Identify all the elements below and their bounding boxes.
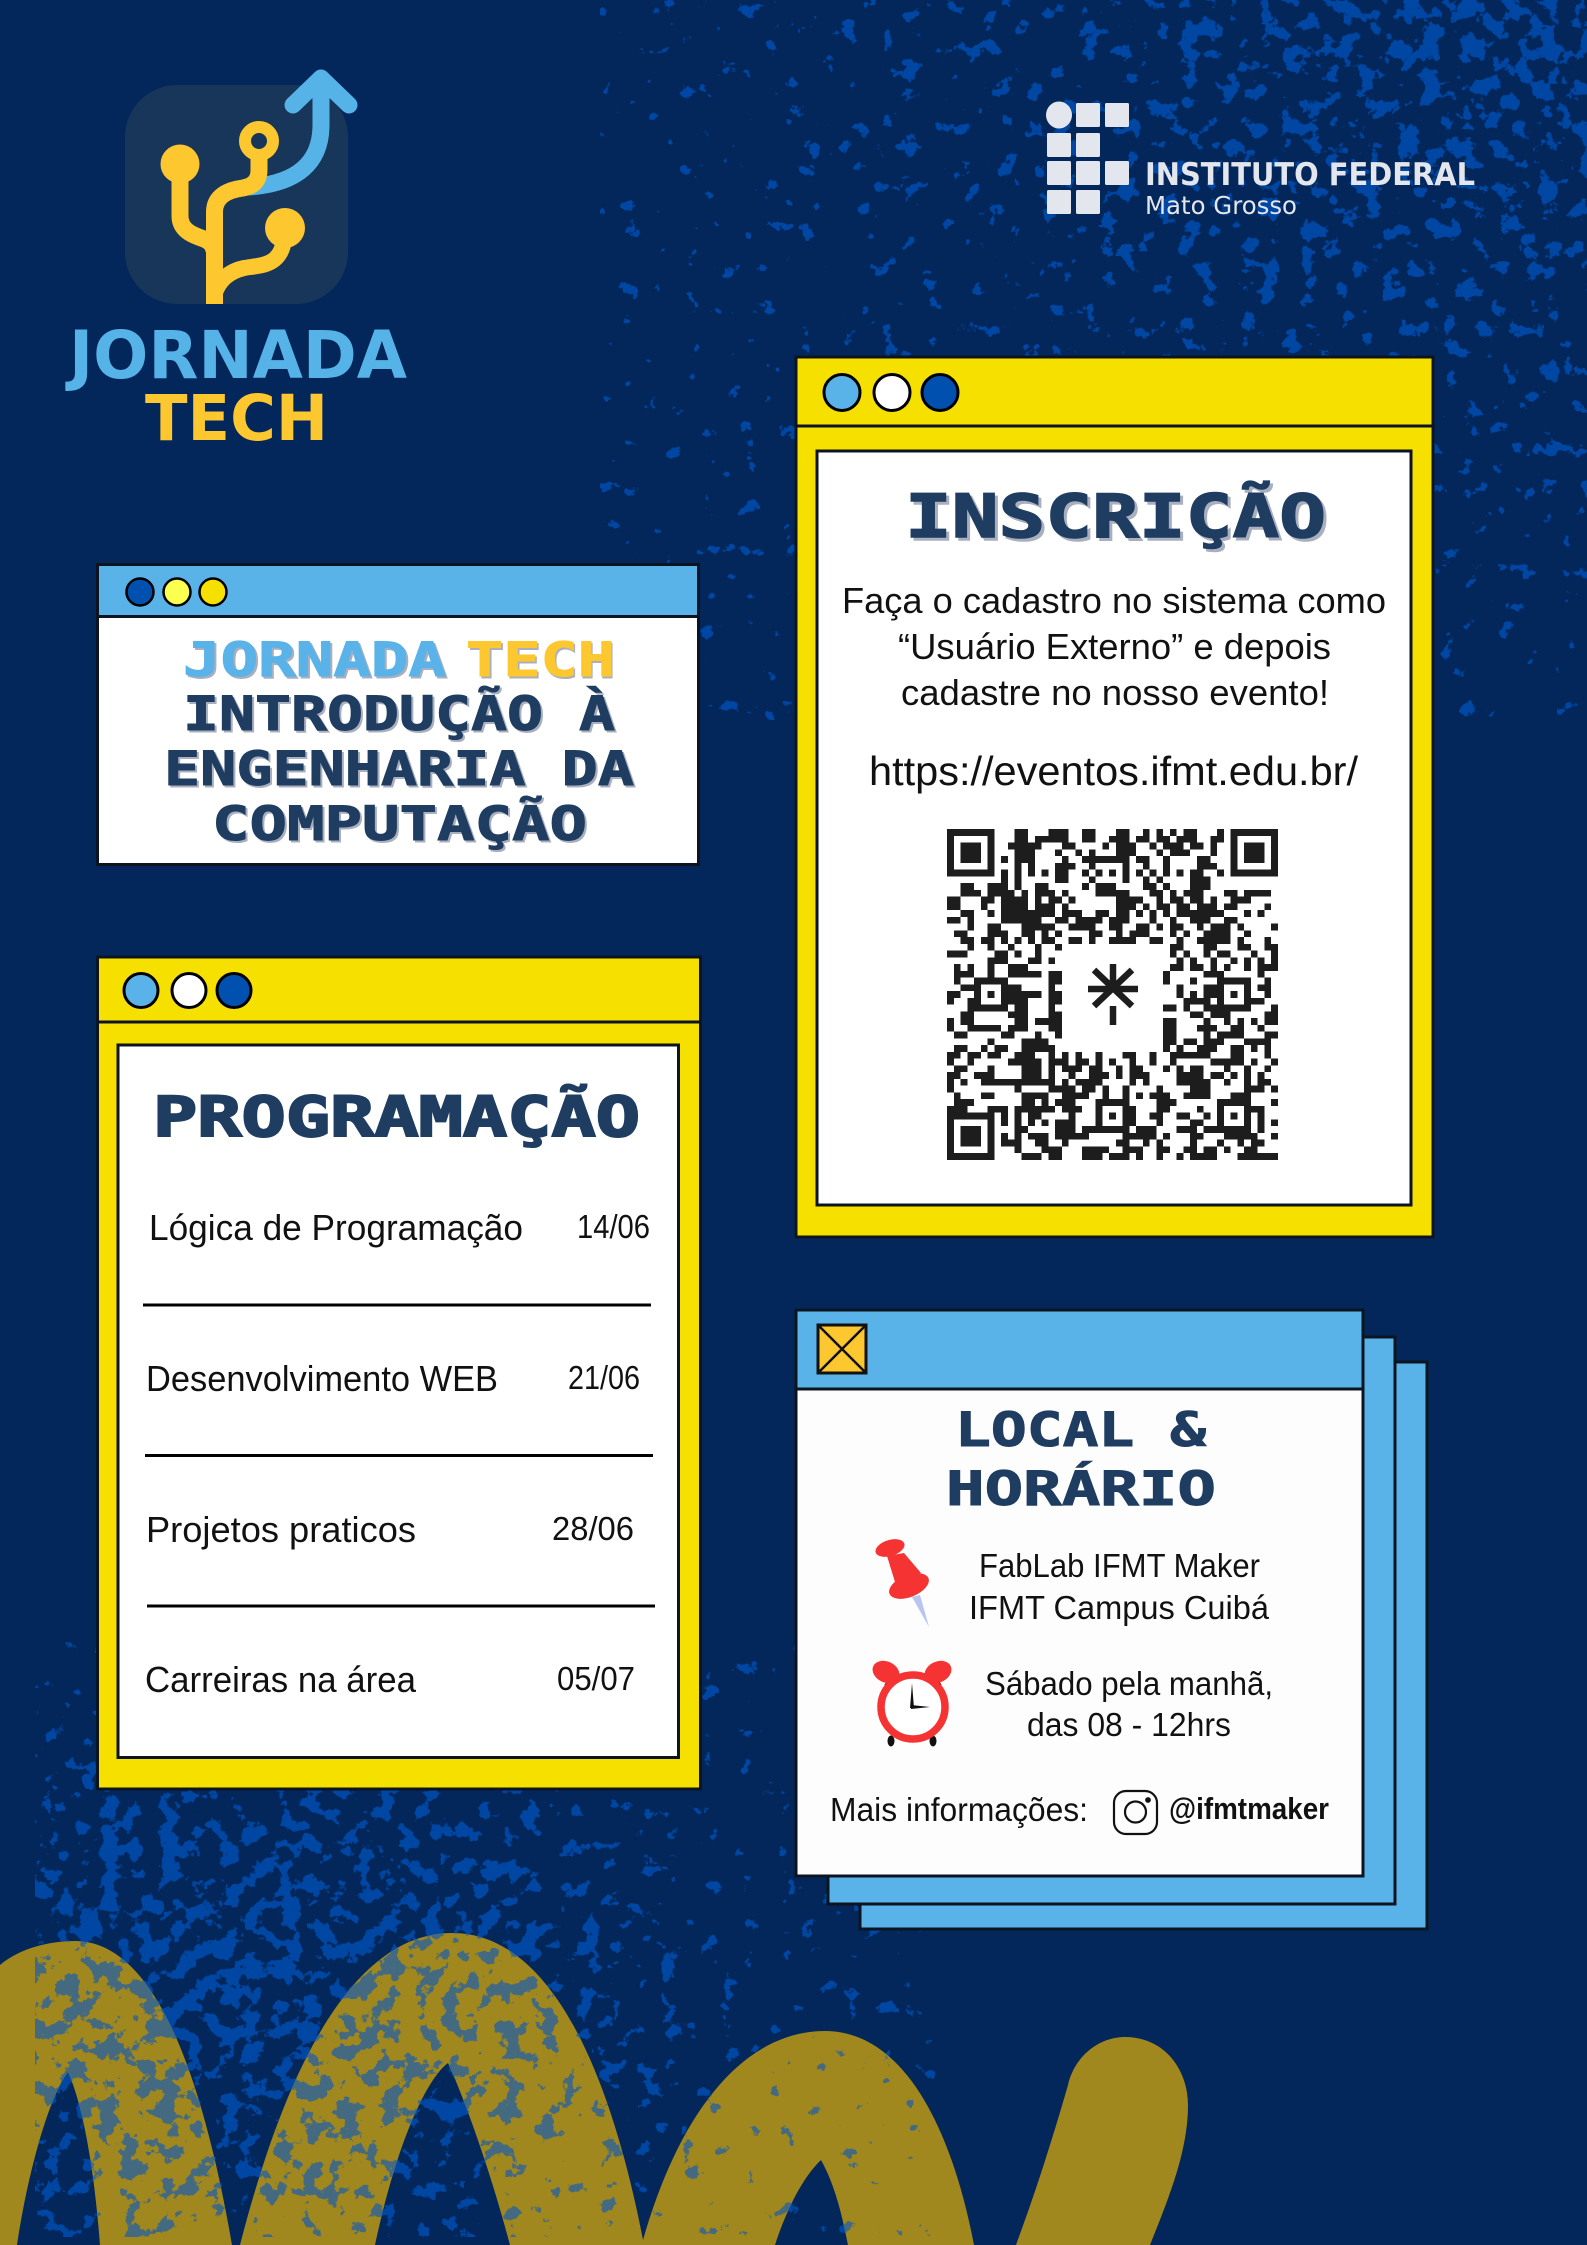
panel: title window [98, 564, 698, 864]
instructions [842, 580, 1386, 713]
schedule text: das 08 - 12hrs [1027, 1706, 1231, 1743]
window buttons [126, 578, 226, 606]
logo wordmark: TECH [145, 382, 328, 455]
schedule rows: Carreiras na área [145, 1659, 417, 1700]
QR code [947, 832, 1278, 1157]
instructions: Faça o cadastro no sistema como [842, 580, 1386, 621]
logo: Instituto Federal Mato Grosso [1046, 102, 1475, 220]
instructions: “Usuário Externo” e depois [898, 626, 1331, 667]
logo: Instituto Federal Mato Grosso: INSTITUTO FEDERAL [1145, 157, 1475, 193]
heading: local e horário [946, 1403, 1216, 1517]
more information: Mais informações: [830, 1791, 1088, 1828]
window buttons [824, 374, 958, 410]
window buttons [124, 974, 251, 1008]
location text: IFMT Campus Cuibá [969, 1589, 1270, 1626]
heading: event title: COMPUTAÇÃO [214, 799, 589, 854]
schedule text [985, 1665, 1273, 1743]
schedule rows: Desenvolvimento WEB [146, 1358, 498, 1399]
heading: programação: PROGRAMAÇÃO [153, 1085, 640, 1149]
heading: event title: COMPUTAÇÃO [212, 797, 587, 852]
schedule rows: Lógica de Programação [149, 1207, 523, 1248]
decorative gold wave [0, 1933, 1188, 2245]
schedule text: Sábado pela manhã, [985, 1665, 1273, 1702]
icon: close box [818, 1325, 866, 1373]
schedule rows: 28/06 [552, 1510, 634, 1547]
texture: top right [600, 0, 1587, 720]
icon: alarm clock [869, 1657, 955, 1746]
heading: event title: INTRODUÇÃO À [183, 687, 615, 742]
instagram handle: @ifmtmaker [1169, 1791, 1329, 1826]
schedule rows: 21/06 [568, 1359, 640, 1396]
icon: push pin [873, 1536, 933, 1627]
logo wordmark: JORNADA [65, 317, 407, 394]
heading: local e horário: LOCAL & [955, 1403, 1207, 1458]
heading: event title: JORNADA [183, 633, 446, 688]
heading: inscrição: INSCRIÇÃO [905, 480, 1326, 552]
panel: programação [97, 957, 700, 1789]
heading: event title: TECH [468, 635, 616, 690]
panel: inscrição [795, 357, 1433, 1237]
icon: instagram [1114, 1791, 1157, 1834]
heading: local e horário: HORÁRIO [946, 1462, 1216, 1517]
schedule rows: 14/06 [577, 1208, 650, 1245]
schedule rows [143, 1207, 655, 1700]
location text: FabLab IFMT Maker [979, 1547, 1260, 1584]
instructions: cadastre no nosso evento! [901, 672, 1329, 713]
qr center logo [1088, 964, 1138, 1025]
location text [969, 1547, 1270, 1626]
logo wordmark [65, 317, 407, 455]
logo: Instituto Federal Mato Grosso: Mato Grosso [1145, 191, 1297, 220]
schedule rows: 05/07 [557, 1660, 635, 1697]
heading: event title: JORNADA [185, 635, 448, 690]
logo: Jornada Tech [65, 78, 407, 455]
icon: circuit tree with arrow [125, 78, 349, 304]
back sheets [828, 1337, 1427, 1929]
link: https://eventos.ifmt.edu.br/ [869, 748, 1359, 794]
heading: inscrição: INSCRIÇÃO [908, 483, 1329, 555]
heading: event title: TECH [466, 633, 615, 688]
texture: bottom left [35, 1620, 935, 2237]
heading: event title [164, 633, 636, 854]
heading: event title: ENGENHARIA DA [164, 742, 634, 797]
panel: local e horário [796, 1310, 1427, 1929]
heading: event title: INTRODUÇÃO À [185, 689, 617, 744]
heading: event title: ENGENHARIA DA [166, 744, 636, 799]
schedule rows: Projetos praticos [146, 1509, 416, 1550]
